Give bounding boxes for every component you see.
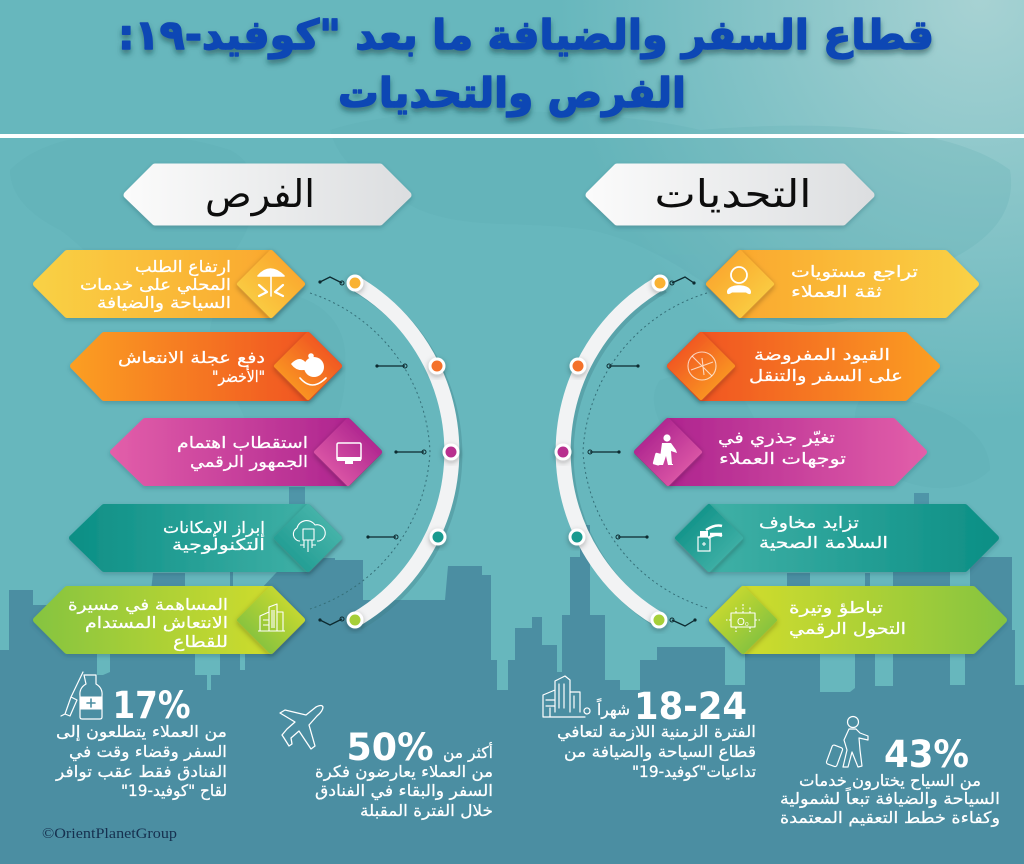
stat: 43%: وكفاءة خطط التعقيم المعتمدة (780, 808, 1000, 828)
icon: cloud technology (293, 521, 325, 552)
text: challenge 3: تغيّر جذري في (718, 428, 835, 448)
panel: challenge 2 (669, 334, 937, 398)
panel: challenge 4 (677, 506, 996, 570)
stat: 17%: لقاح "كوفيد-19" (121, 781, 227, 801)
text: opportunity 5 (68, 595, 228, 652)
stat: 50% (280, 706, 493, 821)
text: opportunity 3 (177, 433, 308, 472)
text: opportunity 1 (80, 257, 231, 313)
stat: 50%: خلال الفترة المقبلة (360, 801, 493, 821)
text: opportunity 1: المحلي على خدمات (80, 275, 231, 295)
stat: 50%: السفر والبقاء في الفنادق (315, 781, 493, 801)
text: challenge 4: تزايد مخاوف (759, 513, 859, 533)
text: challenge 1 (791, 262, 918, 301)
skyline (0, 487, 1024, 864)
white divider bar (0, 134, 1024, 138)
icon: digital chip (726, 604, 760, 632)
stat: 50%: من العملاء يعارضون فكرة (315, 762, 493, 782)
title (118, 11, 934, 118)
right timeline arc (554, 274, 707, 628)
text: challenge 4: السلامة الصحية (759, 533, 888, 552)
copyright: ©OrientPlanetGroup (42, 826, 177, 842)
text: opportunity 2: دفع عجلة الانتعاش (118, 348, 265, 368)
panel: challenge 1 (708, 252, 976, 316)
icon: no travel (688, 352, 716, 380)
text: opportunity 5: للقطاع (173, 632, 228, 652)
world map watermark (10, 111, 1011, 488)
stat: 43% (780, 716, 1000, 828)
text: challenge 5: التحول الرقمي (789, 619, 906, 639)
stat: 17%: من العملاء يتطلعون إلى (56, 722, 227, 742)
stat: 18-24 months: الفترة الزمنية اللازمة لتعافي (557, 722, 756, 742)
stat: 50%: أكثر من (443, 742, 493, 763)
text: opportunity 4: إبراز الإمكانات (163, 518, 265, 538)
icon: city buildings (543, 676, 590, 717)
text: challenge 3 (718, 428, 846, 469)
left timeline arc (310, 274, 460, 628)
panel: challenge 3 (636, 420, 924, 484)
icon: airplane (280, 706, 323, 749)
stat: 18-24 months (543, 676, 756, 782)
stat: 18-24 months: شهراً (596, 697, 630, 720)
text: opportunity 2: "الأخضر" (212, 366, 265, 387)
text: challenge 1: ثقة العملاء (791, 282, 882, 301)
icon: beach umbrella (258, 269, 284, 296)
text: challenge 4 (759, 513, 888, 552)
stat: 17%: السفر وقضاء وقت في (69, 742, 227, 762)
text: opportunity 1: ارتفاع الطلب (135, 257, 231, 277)
panel: opportunity 2 (73, 334, 340, 398)
text: challenge 5: تباطؤ وتيرة (789, 598, 883, 618)
panel: opportunity 3 (113, 420, 380, 484)
text: challenge 1: تراجع مستويات (791, 262, 918, 282)
text: opportunity 4 (163, 518, 265, 555)
text: challenge 2: القيود المفروضة (754, 345, 890, 365)
icon: walking traveller (826, 716, 868, 767)
stat: 18-24 months: 18-24 (634, 685, 747, 728)
text: challenge 2: على السفر والتنقل (749, 366, 903, 386)
text: opportunity 2 (118, 348, 265, 387)
title: الفرص والتحديات (338, 69, 686, 118)
icon: syringe and vaccine bottle (61, 672, 102, 719)
text: opportunity 4: التكنولوجية (172, 535, 265, 555)
text: challenge 2 (749, 345, 903, 386)
stat: 18-24 months: قطاع السياحة والضيافة من (564, 742, 756, 762)
icon: monitor (337, 443, 361, 464)
stat: 18-24 months: تداعيات"كوفيد-19" (632, 762, 756, 782)
text: opportunity 1: السياحة والضيافة (97, 293, 231, 313)
text: opportunity 5: المساهمة في مسيرة (68, 595, 228, 615)
text: opportunity 3: استقطاب اهتمام (177, 433, 308, 452)
stat: 43%: السياحة والضيافة تبعاً لشمولية (780, 786, 1000, 809)
stat: 17% (55, 672, 227, 801)
icon: person (727, 267, 751, 294)
stat: 43%: من السياح يختارون خدمات (799, 771, 981, 791)
icon: green globe (292, 354, 326, 385)
heading: challenges (589, 167, 871, 222)
panel: challenge 5 (711, 588, 1004, 652)
icon: traveller with suitcase (653, 434, 677, 466)
stat: 50%: 50% (346, 726, 434, 769)
icon: sanitizer and hands (698, 526, 722, 551)
connector lines (318, 277, 697, 626)
text: challenge 3: توجهات العملاء (719, 449, 846, 469)
heading: opportunities: الفرص (205, 172, 315, 217)
heading: opportunities (127, 167, 408, 222)
stat: 17%: الفنادق فقط عقب توافر (55, 762, 227, 782)
stat: 43%: 43% (884, 733, 969, 776)
panel: opportunity 4 (72, 506, 340, 570)
icon: buildings (258, 604, 285, 631)
icon: digital chip: O₀ (737, 617, 749, 628)
text: opportunity 3: الجمهور الرقمي (190, 452, 308, 472)
panel: opportunity 5 (36, 588, 303, 652)
stat: 17%: 17% (112, 684, 190, 727)
text: challenge 5 (789, 598, 906, 639)
title: قطاع السفر والضيافة ما بعد "كوفيد-١٩: (118, 11, 934, 60)
heading: challenges: التحديات (654, 172, 812, 216)
text: opportunity 5: الانتعاش المستدام (85, 613, 228, 632)
panel: opportunity 1 (36, 252, 303, 316)
